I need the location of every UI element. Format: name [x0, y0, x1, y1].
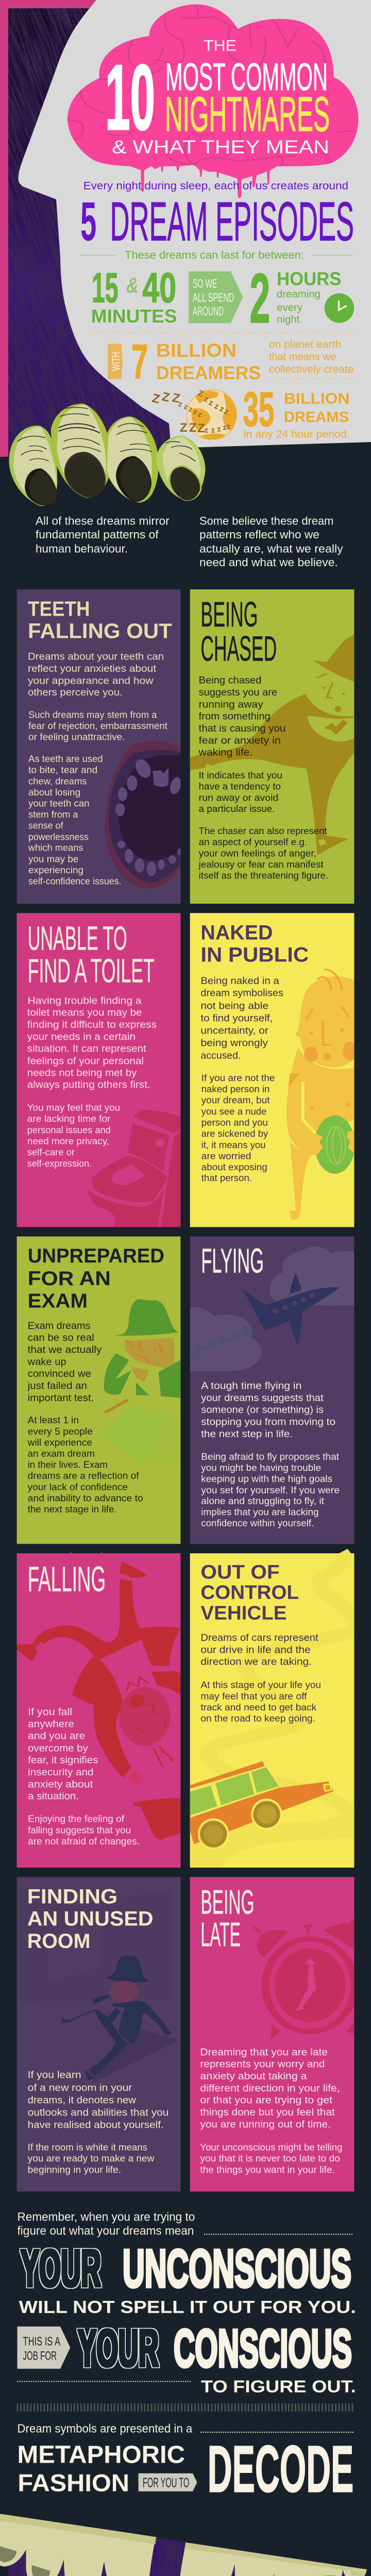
stat: 15 and 40 minutes: 15 [92, 265, 119, 311]
text block: keeping up with the high goals [201, 1474, 332, 1484]
arrow: so we all spend around: SO WE [193, 277, 217, 291]
text block: dreams are a reflection of [28, 1471, 140, 1481]
stat: 35 billion dreams: 35 [243, 382, 275, 437]
text block: Being chased [199, 675, 261, 686]
text block: the things you want in your life. [200, 2164, 335, 2175]
heading [27, 1885, 153, 1953]
title: THE [204, 37, 237, 54]
text block: from something [199, 711, 271, 722]
icon: z z z sleep trails: ZZZ [180, 421, 205, 435]
text block: you might be having trouble [201, 1463, 321, 1473]
stat: 7 billion dreamers: that means we [269, 351, 336, 363]
arrow: this is a job for [18, 2327, 70, 2369]
heading: your conscious: TO FIGURE OUT. [201, 2377, 356, 2396]
text block: and you are [28, 1731, 85, 1742]
title [105, 37, 330, 158]
heading [28, 597, 172, 642]
text block: reflect your anxieties about [28, 664, 157, 674]
background: grey head panel [0, 0, 371, 464]
text block [200, 976, 283, 1183]
stat: 7 billion dreamers: DREAMERS [156, 362, 261, 383]
text block: on the road to keep going. [200, 1714, 315, 1724]
text block: to find yourself, [200, 1013, 273, 1024]
text block: to bite, tear and [28, 765, 97, 775]
text block: intro left: fundamental patterns of [36, 528, 159, 541]
text block: dream episodes: 5 [80, 191, 96, 252]
panel: teeth falling out [17, 589, 183, 904]
stat: 7 billion dreamers [92, 333, 353, 388]
text block: feelings of your personal [27, 1056, 144, 1066]
text block: have realised about yourself. [28, 2120, 164, 2131]
heading: LATE [200, 1916, 241, 1954]
text block: Having trouble finding a [28, 995, 142, 1006]
icon: falling man [16, 1553, 180, 1840]
text block: alone and struggling to fly, it [201, 1496, 324, 1506]
text block: are sickened by [201, 1129, 268, 1139]
text block: it, it means you [201, 1140, 266, 1150]
text block: track and need to get back [200, 1702, 317, 1713]
text block: intro right: need and what we believe. [199, 556, 338, 569]
heading: your conscious: YOUR [78, 2318, 159, 2378]
text block: you set for yourself. If you were [201, 1485, 340, 1495]
panel: unable to find a toilet [17, 913, 180, 1227]
heading: your conscious [18, 2318, 356, 2396]
text block: your dream, but [201, 1095, 269, 1106]
text block: experiencing [28, 865, 83, 875]
text block: intro right: Some believe these dream [199, 514, 333, 527]
panel: finding an unused room [17, 1877, 180, 2192]
text block: and inability to advance to [28, 1493, 143, 1503]
text block: you are ready to make a new [28, 2154, 155, 2164]
text block: overcome by [28, 1743, 88, 1754]
icon: sleeping globe [187, 389, 238, 442]
icon: z z z sleep trails: zzzzz [204, 422, 231, 435]
text block: that is causing you [199, 723, 285, 734]
icon: z z z sleep trails: Zzzzzz [197, 389, 230, 416]
text block [28, 1707, 140, 1846]
text block: intro right: patterns reflect who we [199, 528, 319, 541]
text block: run away or avoid [199, 792, 278, 803]
text block: At this stage of your life you [200, 1680, 321, 1690]
heading: EXAM [28, 1290, 88, 1312]
text block: falling suggests that you [28, 1825, 131, 1835]
text block: will experience [27, 1437, 92, 1448]
text block: anywhere [28, 1719, 74, 1730]
text block: remember [18, 2210, 353, 2237]
text block: personal issues and [27, 1125, 111, 1135]
purple hair below teeth [8, 2509, 363, 2576]
text block: represents your worry and [200, 2059, 325, 2070]
text block: waking life. [198, 748, 252, 758]
stat: 2 hours dreaming: dreaming [277, 289, 321, 300]
icon: worried student [99, 1299, 180, 1467]
panel: naked in public [190, 913, 357, 1227]
stat: 2 hours dreaming: 2 [249, 259, 270, 337]
text block: You may feel that you [27, 1103, 120, 1113]
text block: direction we are taking. [200, 1657, 312, 1668]
text block: accused. [200, 1050, 241, 1061]
text block: dreams, it denotes new [28, 2095, 136, 2106]
icon: plane and clouds [190, 1247, 354, 1371]
text block: fear, it signifies [28, 1755, 98, 1766]
arrow: so we all spend around: AROUND [193, 304, 224, 318]
stat: 35 billion dreams: BILLION [284, 390, 350, 407]
text block: naked person in [201, 1084, 269, 1094]
heading: BEING [200, 595, 258, 634]
icon: z z z sleep trails: zzzzz [177, 399, 203, 419]
stat: 2 hours dreaming [249, 259, 342, 337]
text block: fear of rejection, embarrassment [28, 721, 167, 731]
text block: Dreaming that you are late [200, 2047, 328, 2058]
heading: metaphoric fashion: FASHION [18, 2469, 129, 2497]
heading: your unconscious: WILL NOT SPELL IT OUT FOR YOU. [19, 2297, 356, 2317]
text block: outlooks and abilities that you [28, 2108, 168, 2119]
text block [201, 1381, 340, 1529]
heading: metaphoric fashion [18, 2442, 185, 2497]
text block: in their lives. Exam [28, 1460, 108, 1470]
heading [28, 919, 155, 990]
heading: VEHICLE [200, 1602, 286, 1624]
text block: always putting others first. [27, 1080, 150, 1091]
text block: are lacking time for [27, 1114, 110, 1124]
text block [200, 1633, 321, 1724]
text block: anxiety about [28, 1779, 93, 1790]
icon: alarm clock [253, 1919, 359, 2039]
finger one [9, 426, 57, 506]
text block: remember: figure out what your dreams mean [18, 2224, 194, 2237]
icon: pink brain cloud [68, 4, 359, 198]
text block: someone (or something) is [201, 1405, 324, 1416]
text block: self-expression. [27, 1158, 92, 1168]
heading [28, 1245, 164, 1312]
text block: you are running out of time. [200, 2119, 331, 2130]
text block: confidence within yourself. [201, 1518, 314, 1529]
icon: monster fingers [9, 403, 206, 506]
title: 10 [105, 46, 155, 149]
text block: important test. [28, 1393, 94, 1403]
head silhouette [19, 0, 371, 453]
text block: At least 1 in [28, 1415, 79, 1426]
text block: every 5 people [28, 1426, 93, 1436]
text block: Being afraid to fly proposes that [201, 1451, 339, 1462]
text block: different direction in your life, [200, 2083, 340, 2094]
text block: uncertainty, or [200, 1026, 269, 1037]
heading [200, 595, 277, 669]
text block: you may be [28, 854, 78, 864]
text block [27, 995, 157, 1168]
arrow: so we all spend around [189, 272, 243, 323]
arrow: this is a job for: THIS IS A [23, 2335, 60, 2349]
heading: NAKED [200, 921, 273, 944]
icon: man in a room [62, 1956, 179, 2083]
stat: 2 hours dreaming: every [277, 302, 302, 313]
text block: A tough time flying in [201, 1381, 301, 1392]
text block: Dreams of cars represent [200, 1633, 318, 1643]
text block: your dreams suggests that [201, 1393, 324, 1403]
heading: FINDING [27, 1885, 117, 1908]
text block: a particular issue. [199, 804, 275, 814]
text block: or feeling unattractive. [28, 732, 125, 742]
text block: may feel that you are off [200, 1691, 308, 1701]
text block: insecurity and [28, 1767, 93, 1778]
text block: dream episodes: Every night during sleep, each of us creates around [83, 180, 348, 192]
text block: chew, dreams [28, 776, 87, 786]
heading: your unconscious [19, 2239, 356, 2317]
stat: 7 billion dreamers: collectively create [269, 364, 353, 375]
text block: toilet means you may be [27, 1008, 142, 1019]
text block: dream symbolises [200, 988, 283, 998]
text block: running away [199, 699, 263, 710]
text block: If the room is white it means [28, 2142, 147, 2153]
text block: intro left [36, 514, 170, 555]
icon: winding road [190, 1552, 357, 1868]
arrow: for you to: FOR YOU TO [143, 2475, 189, 2490]
text block: that we actually [28, 1345, 102, 1355]
panel: out of control vehicle [190, 1552, 357, 1868]
heading: FALLING [28, 1559, 106, 1599]
text block: which means [28, 843, 83, 853]
icon: screaming mouth [105, 741, 183, 889]
text block: itself as the threatening figure. [199, 871, 328, 881]
text block: jealousy or fear can manifest [198, 859, 324, 870]
panel: being chased [190, 589, 354, 904]
text block: self-care or [27, 1147, 75, 1158]
finger two [51, 403, 111, 498]
text block [200, 2047, 342, 2175]
stat: 35 billion dreams [243, 382, 350, 440]
purple hair behind head [8, 8, 170, 456]
text block: an aspect of yourself e.g. [199, 837, 307, 848]
title: & WHAT THEY MEAN [112, 137, 329, 158]
text block: or that you are trying to get [200, 2095, 333, 2106]
icon: clock [325, 293, 354, 323]
stat: 7 billion dreamers: 7 [131, 334, 148, 388]
text block: intro right [199, 514, 343, 569]
text block: anxiety about taking a [200, 2071, 307, 2082]
text block: wake up [27, 1357, 66, 1367]
text block: can be so real [28, 1333, 94, 1344]
heading: metaphoric fashion: METAPHORIC [18, 2442, 185, 2469]
text block: things done but you feel that [200, 2107, 335, 2118]
stat: 15 and 40 minutes: MINUTES [91, 306, 177, 327]
heading: UNABLE TO [28, 919, 127, 957]
text block: person and you [201, 1117, 268, 1128]
text block: needs not being met by [27, 1067, 137, 1078]
text block [27, 1320, 143, 1515]
text block: your lack of confidence [28, 1482, 128, 1492]
heading: IN PUBLIC [200, 944, 309, 967]
heading: TEETH [28, 597, 90, 620]
icon: z z z sleep trails [151, 389, 231, 435]
icon: orange car [190, 1761, 333, 1850]
text block: you that it is never too late to do [200, 2154, 340, 2164]
text block: that person. [201, 1173, 252, 1183]
text block: being wrongly [200, 1038, 268, 1049]
text block: dream symbols: Dream symbols are presented in a [18, 2422, 192, 2435]
stat: 15 and 40 minutes: 40 [142, 265, 176, 311]
arrow: this is a job for: JOB FOR [23, 2349, 57, 2363]
text block: the next stage in life. [28, 1504, 117, 1515]
text block: your own feelings of anger, [199, 848, 316, 858]
text block: an exam dream [28, 1448, 95, 1459]
stat: 35 billion dreams: in any 24 hour period. [244, 428, 350, 440]
stat: 2 hours dreaming: night. [277, 314, 302, 326]
icon: chasing man [190, 635, 354, 855]
text block: Dreams about your teeth can [28, 652, 164, 663]
text block: It indicates that you [199, 770, 282, 781]
pink frame [0, 0, 98, 457]
stat: 7 billion dreamers: on planet earth [269, 339, 341, 350]
stat: 7 billion dreamers: WITH [110, 352, 122, 371]
heading [200, 1883, 255, 1954]
stat: 7 billion dreamers: BILLION [156, 340, 237, 361]
text block: If you are not the [201, 1073, 275, 1083]
text block: just failed an [27, 1381, 87, 1392]
text block: Such dreams may stem from a [28, 709, 157, 720]
text block: you see a nude [201, 1106, 266, 1116]
text block: dream length intro: These dreams can last for between: [125, 249, 304, 261]
text block: finding it difficult to express [27, 1020, 157, 1030]
text block: intro right: actually are, what we really [199, 542, 343, 555]
text block: your needs in a certain [27, 1031, 136, 1042]
heading: ROOM [27, 1930, 90, 1953]
text block: suggests you are [199, 687, 277, 698]
arrow: for you to [139, 2473, 197, 2492]
text block: remember: Remember, when you are trying to [18, 2210, 195, 2224]
stat: 35 billion dreams: DREAMS [284, 409, 349, 426]
text block: of a new room in your [28, 2082, 132, 2093]
icon: naked man [286, 970, 357, 1220]
icon: z z z sleep trails: ZZZ [151, 389, 181, 406]
text block: Being naked in a [200, 976, 279, 987]
text block: your teeth can [28, 798, 90, 808]
text block: the next step in life. [201, 1429, 293, 1439]
stat: 15 and 40 minutes: & [126, 273, 139, 297]
panel: unprepared for an exam [17, 1236, 180, 1544]
stat: 2 hours dreaming: HOURS [277, 268, 342, 289]
text block: about losing [28, 787, 80, 798]
finger three [107, 416, 159, 503]
text block: sense of [28, 821, 64, 831]
text block: not being able [200, 1001, 268, 1011]
icon: monster teeth [0, 2514, 367, 2576]
finger four [156, 435, 206, 501]
text block: about exposing [201, 1162, 267, 1173]
text block: our drive in life and the [200, 1645, 311, 1655]
text block: convinced we [28, 1369, 91, 1380]
text block: As teeth are used [28, 754, 103, 764]
panel: being late [190, 1877, 359, 2192]
heading: CONTROL [200, 1582, 299, 1603]
heading: OUT OF [200, 1562, 280, 1583]
text block: a situation. [28, 1791, 79, 1802]
text block: If you learn [28, 2070, 81, 2080]
text block: If you fall [28, 1707, 72, 1718]
text block: The chaser can also represent [199, 826, 327, 836]
text block: beginning in your life. [28, 2164, 121, 2175]
text block: fear or anxiety in [199, 735, 281, 746]
icon: toilet [88, 1110, 180, 1227]
text block: need more privacy, [27, 1136, 109, 1146]
text block: powerlessness [28, 832, 89, 842]
panel: flying [190, 1236, 354, 1544]
text block: stopping you from moving to [201, 1417, 335, 1428]
text block: your appearance and how [28, 675, 154, 686]
heading [200, 921, 309, 967]
heading: your unconscious: YOUR [21, 2239, 101, 2298]
heading [200, 1562, 299, 1624]
heading: UNPREPARED [28, 1245, 164, 1267]
heading: FIND A TOILET [28, 952, 155, 990]
heading: CHASED [200, 629, 277, 669]
text block: have a tendency to [199, 782, 281, 792]
text block: stem from a [28, 809, 78, 820]
text block: are not afraid of changes. [28, 1836, 140, 1846]
text block: others perceive you. [28, 687, 123, 698]
text block: Enjoying the feeling of [28, 1814, 125, 1824]
heading: FALLING OUT [28, 619, 172, 642]
text block [198, 675, 328, 881]
stat: 15 and 40 minutes [91, 265, 177, 327]
text block: Exam dreams [28, 1320, 90, 1331]
text block: are worried [201, 1151, 251, 1161]
heading: AN UNUSED [27, 1908, 153, 1930]
text block: intro left: All of these dreams mirror [36, 514, 170, 527]
panel: falling [16, 1553, 180, 1868]
text block: self-confidence issues. [28, 876, 122, 887]
text block: intro left: human behaviour. [36, 542, 128, 555]
heading: FOR AN [28, 1268, 111, 1290]
arrow: so we all spend around: ALL SPEND [193, 291, 234, 304]
heading: BEING [200, 1883, 255, 1921]
text block: implies that you are lacking [201, 1507, 318, 1517]
text block: Your unconscious might be telling [200, 2142, 342, 2153]
text block [28, 652, 167, 887]
text block: situation. It can represent [27, 1044, 146, 1055]
heading: FLYING [201, 1242, 264, 1280]
text block [28, 2070, 168, 2175]
